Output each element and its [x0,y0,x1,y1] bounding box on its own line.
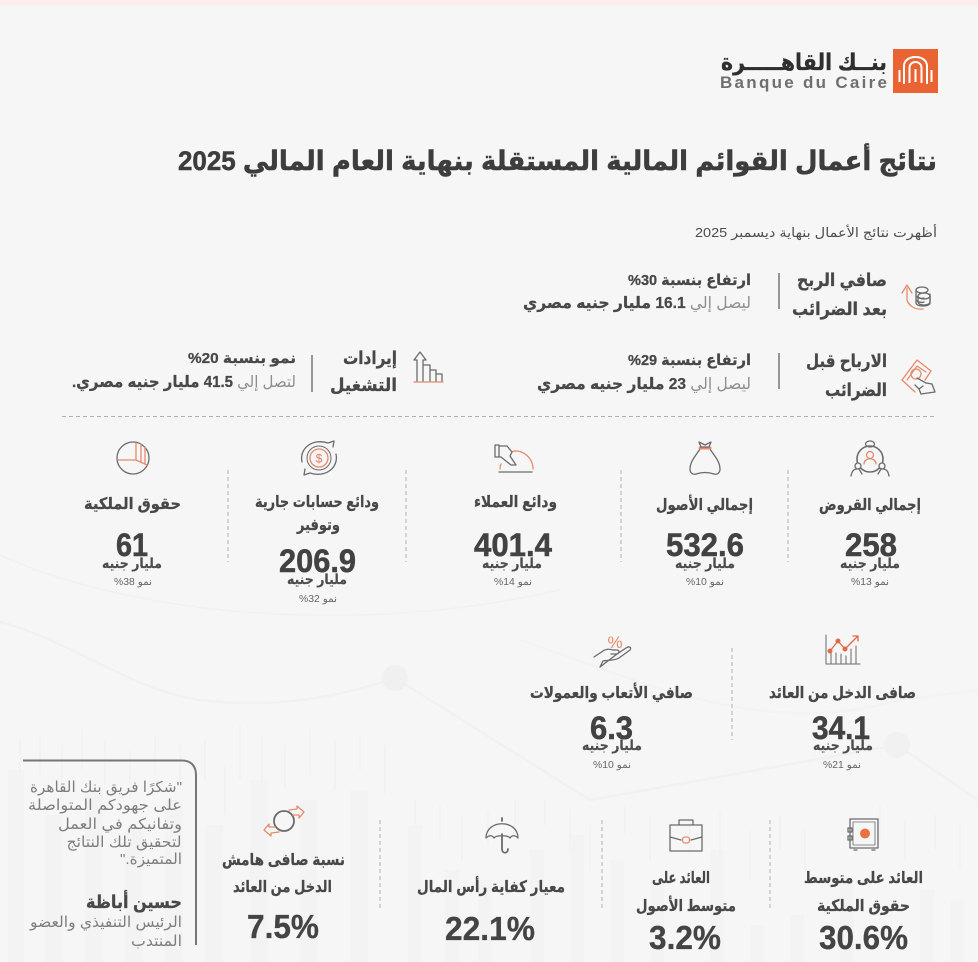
panel: net profit after tax: بعد الضرائب [792,299,887,320]
title: نتائج أعمال القوائم المالية المستقلة بنهاية العام المالي 2025 [178,143,937,177]
panel: operating revenue: التشغيل [330,375,397,395]
icon: umbrella [486,818,518,853]
metric: return on average assets: العائد على [652,870,710,887]
metric: net fees and commissions: صافي الأتعاب والعمولات [530,683,693,703]
metric: net interest income: مليار جنيه [813,737,873,753]
panel: profit before tax: الضرائب [825,380,887,401]
icon: banknote in hand [902,360,935,394]
icon: hand with percent [594,633,631,667]
metric: return on average equity [804,819,923,956]
icon: pie chart [117,442,149,474]
metric: total loans: نمو 13% [851,577,889,588]
icon: hand with percent: % [607,633,623,652]
quote frame [23,760,196,945]
icon: rising bars [414,352,443,382]
metric: current and savings deposits: ودائع حسابات جارية [255,494,379,511]
metric: return on average equity: العائد على متوسط [804,870,923,887]
metric: equity [84,442,181,588]
metric: net interest income: نمو 21% [823,760,861,771]
icon: dollar cycle: $ [316,452,323,466]
metric: current and savings deposits: نمو 32% [299,594,337,605]
metric: total assets: مليار جنيه [675,555,735,571]
metric: customer deposits: مليار جنيه [482,555,542,571]
growth text: ارتفاع بنسبة 29% [628,352,751,369]
metric: return on average assets: متوسط الأصول [636,896,736,915]
metric: customer deposits [474,445,557,588]
metric: customer deposits: نمو 14% [494,577,532,588]
icon: sack [690,442,720,474]
metric: current and savings deposits [255,441,379,605]
logo arabic wordmark: بنــك القاهـــــرة [721,49,887,76]
icon: line chart [826,635,860,664]
metric: net interest margin: الدخل من العائد [233,879,332,896]
metric: total loans [819,441,921,588]
label: إيرادات [343,348,397,369]
metric: current and savings deposits: مليار جنيه [287,571,347,587]
metric: capital adequacy ratio [417,818,565,947]
logo: Banque du Caire [720,49,938,93]
quote text: "شكرًا فريق بنك القاهرة [30,779,182,796]
logo mark [893,49,938,93]
metric: net interest margin [222,806,345,945]
metric: customer deposits: ودائع العملاء [474,494,557,511]
growth text: نمو بنسبة 20% [188,350,296,367]
subtitle: أظهرت نتائج الأعمال بنهاية ديسمبر 2025 [695,224,937,241]
icon: money bag with people [851,441,889,476]
panel: net profit after tax: ليصل إلي 16.1 مليار جنيه مصري [523,295,751,313]
metric: total assets: 532.6 [666,527,744,563]
metric: return on average equity: 30.6% [819,919,908,956]
panel: profit before tax: ليصل إلي 23 مليار جنيه مصري [537,376,751,394]
metric: net interest income [769,635,916,771]
panel: CEO quote [23,760,196,950]
icon: briefcase [670,820,702,851]
divider [311,355,313,392]
metric: net interest margin: 7.5% [247,908,319,945]
icon: coins with arrow [902,285,930,309]
speaker name: حسين أباظة [86,890,182,913]
icon: dollar cycle [302,441,336,475]
logo latin wordmark: Banque du Caire [720,73,887,92]
panel: CEO quote: على جهودكم المتواصلة [28,797,182,814]
panel: CEO quote: المنتدب [131,933,182,950]
panel: CEO quote: وتفانيكم في العمل [58,816,182,834]
label: الارباح قبل [806,351,887,371]
divider [778,353,780,389]
icon: hand dropping coin [495,445,533,472]
icon: safe [848,819,878,850]
metric: net fees and commissions: مليار جنيه [582,737,642,753]
metric: net fees and commissions: نمو 10% [593,760,631,771]
metric: equity: حقوق الملكية [84,496,181,513]
metric: equity: نمو 38% [114,577,152,588]
metric: net interest margin: نسبة صافى هامش [222,852,345,869]
growth text: ارتفاع بنسبة 30% [628,272,751,289]
icon: circle with arrows [264,806,304,836]
metric: return on average assets [636,820,736,956]
metric: return on average equity: حقوق الملكية [817,898,910,915]
metric: capital adequacy ratio: 22.1% [445,910,535,947]
background watermark chart [0,555,978,962]
metric: total assets [656,442,753,588]
metric: total assets: نمو 10% [686,577,724,588]
metric: total assets: إجمالي الأصول [656,495,753,515]
metric: net fees and commissions [530,633,693,771]
panel: profit before tax [537,351,935,401]
metric: return on average assets: 3.2% [649,919,721,956]
panel: operating revenue: لتصل إلي 41.5 مليار جنيه مصري. [72,374,296,392]
panel: net profit after tax [523,270,930,320]
label: صافي الربح [797,270,887,291]
metric: net fees and commissions: 6.3 [590,710,633,746]
metric: total loans: 258 [845,527,897,563]
panel: operating revenue [72,348,443,395]
speaker role: الرئيس التنفيذي والعضو [29,914,182,932]
metric: capital adequacy ratio: معيار كفاية رأس المال [417,876,565,896]
panel: CEO quote: المتميزة." [120,851,182,868]
metric: equity: 61 [116,527,148,563]
metric: current and savings deposits: وتوفير [296,517,340,534]
metric: equity: مليار جنيه [102,555,162,571]
panel: CEO quote: لتحقيق تلك النتائج [66,834,182,851]
metric: net interest income: صافى الدخل من العائد [769,685,916,702]
metric: current and savings deposits: 206.9 [279,543,356,579]
metric: total loans: إجمالي القروض [819,497,921,515]
metric: net interest income: 34.1 [812,710,870,746]
metric: customer deposits: 401.4 [474,527,552,563]
divider [778,273,780,309]
metric: total loans: مليار جنيه [840,555,900,571]
